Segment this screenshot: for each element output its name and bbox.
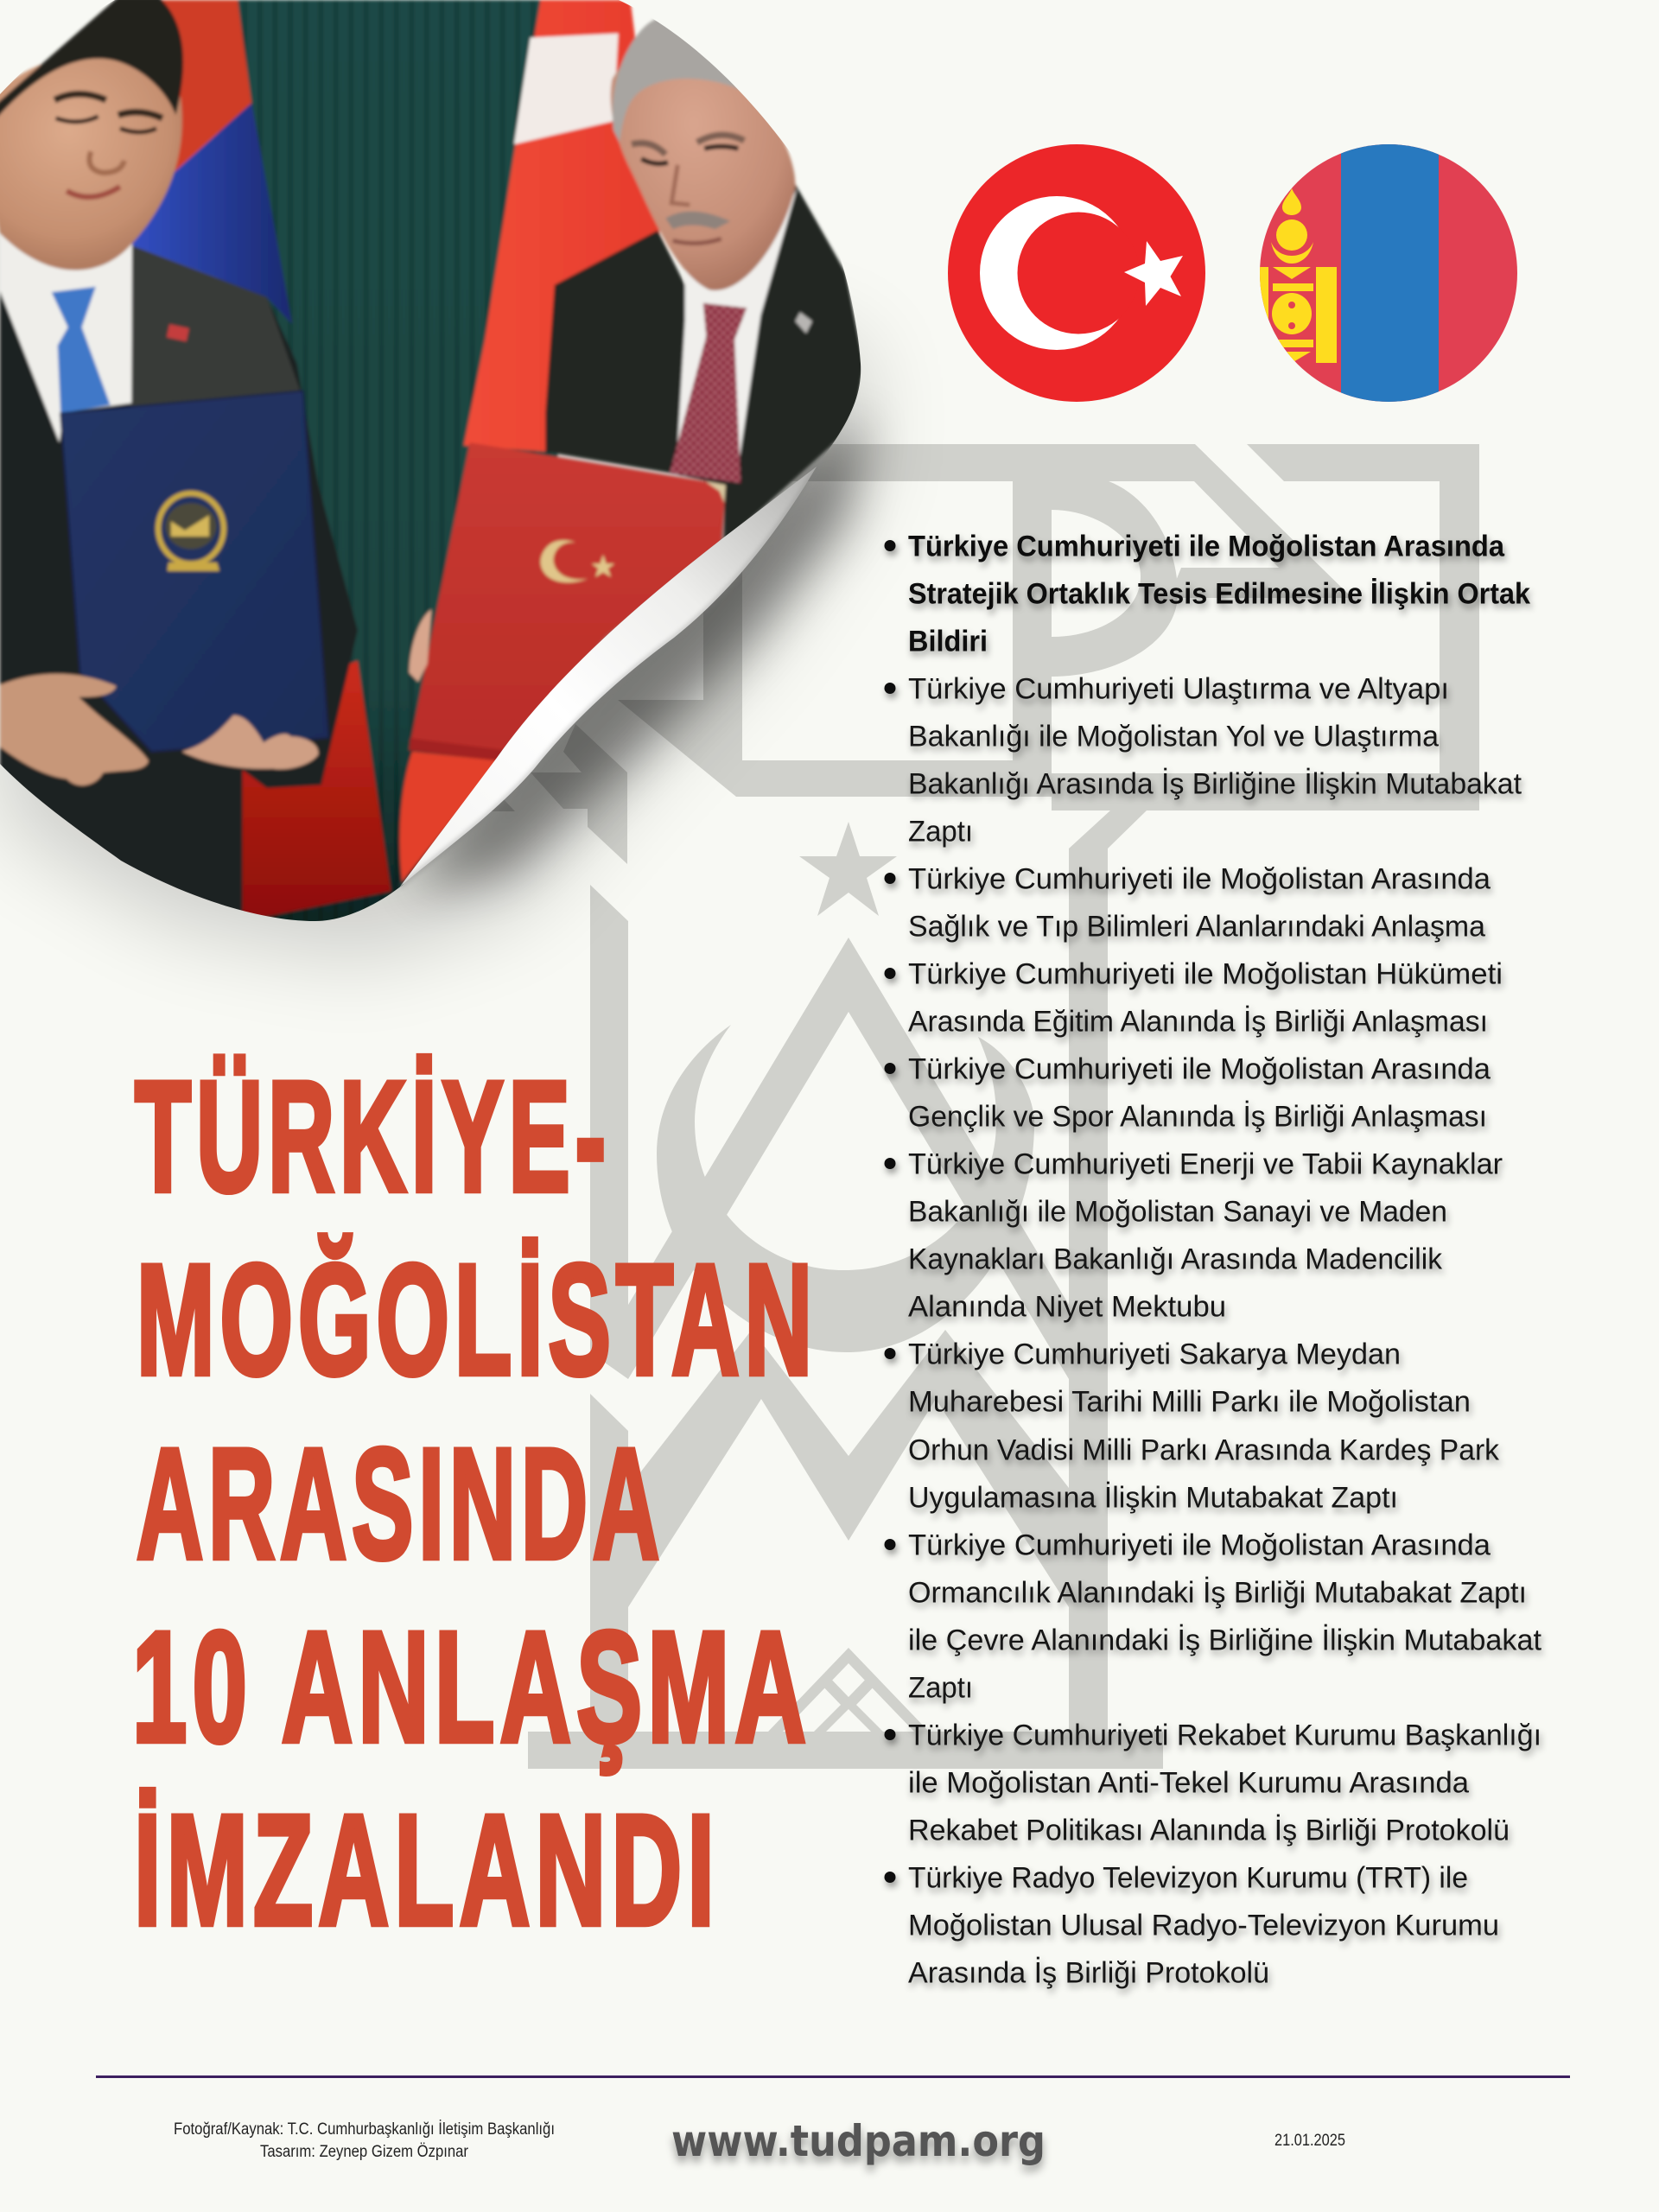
photo: leaders holding signed folders	[0, 0, 864, 951]
item 7: Türkiye Cumhuriyeti Sakarya Meydan	[908, 1338, 1401, 1370]
footer credits: Fotoğraf/Kaynak: T.C. Cumhurbaşkanlığı İletişim Başkanlığı	[174, 2120, 555, 2139]
item 6	[885, 1147, 1503, 1324]
hands on blue folder	[0, 674, 318, 785]
item 1: Bildiri	[908, 626, 988, 658]
watermark logo	[485, 444, 1479, 1769]
item 9: Rekabet Politikası Alanında İş Birliği Protokolü	[908, 1815, 1510, 1847]
item 6: Türkiye Cumhuriyeti Enerji ve Tabii Kaynaklar	[908, 1147, 1503, 1180]
item 8: Ormancılık Alanındaki İş Birliği Mutabakat Zaptı	[908, 1576, 1527, 1609]
red document folder	[410, 442, 726, 760]
title: MOĞOLİSTAN	[137, 1231, 817, 1408]
item 3	[885, 862, 1491, 944]
footer credits	[174, 2120, 555, 2161]
item 8: ile Çevre Alanındaki İş Birliğine İlişkin Mutabakat	[908, 1624, 1542, 1657]
item 3: Türkiye Cumhuriyeti ile Moğolistan Arasında	[908, 862, 1491, 895]
item 9	[885, 1719, 1541, 1847]
gold emblem	[158, 493, 224, 571]
footer rule	[96, 2075, 1570, 2078]
item 4	[885, 957, 1503, 1039]
soyombo symbol	[1258, 188, 1337, 363]
left leader	[0, 0, 358, 921]
item 9: Türkiye Cumhuriyeti Rekabet Kurumu Başkanlığı	[908, 1719, 1541, 1752]
Turkish flag behind right leader	[400, 0, 661, 882]
item 1	[885, 531, 1530, 658]
item 6: Bakanlığı ile Moğolistan Sanayi ve Maden	[908, 1196, 1447, 1229]
item 2: Bakanlığı ile Moğolistan Yol ve Ulaştırma	[908, 721, 1439, 753]
item 2	[885, 672, 1522, 849]
item 4: Arasında Eğitim Alanında İş Birliği Anlaşması	[908, 1006, 1488, 1039]
item 9: ile Moğolistan Anti-Tekel Kurumu Arasında	[908, 1766, 1469, 1799]
photo shadow	[0, 173, 864, 959]
flag: Turkey	[948, 144, 1206, 403]
item 8: Zaptı	[908, 1671, 973, 1704]
item 6: Alanında Niyet Mektubu	[908, 1291, 1226, 1324]
item 1: Stratejik Ortaklık Tesis Edilmesine İlişkin Ortak	[908, 577, 1530, 610]
item 4: Türkiye Cumhuriyeti ile Moğolistan Hükümeti	[908, 957, 1503, 990]
item 8	[885, 1529, 1542, 1704]
item 10: Moğolistan Ulusal Radyo-Televizyon Kurumu	[908, 1910, 1499, 1942]
item 1: Türkiye Cumhuriyeti ile Moğolistan Arasında	[908, 531, 1505, 563]
item 10	[885, 1861, 1499, 1989]
curtain backdrop	[219, 0, 557, 951]
item 7: Uygulamasına İlişkin Mutabakat Zaptı	[908, 1481, 1398, 1514]
item 2: Bakanlığı Arasında İş Birliğine İlişkin Mutabakat	[908, 767, 1522, 800]
item 5	[885, 1052, 1491, 1134]
item 10: Türkiye Radyo Televizyon Kurumu (TRT) ile	[908, 1861, 1468, 1894]
item 5: Türkiye Cumhuriyeti ile Moğolistan Arasında	[908, 1052, 1491, 1085]
blue document folder	[60, 391, 328, 752]
agreements list	[885, 531, 1542, 1989]
flag: Mongolia	[1258, 144, 1518, 403]
title: İMZALANDI	[134, 1782, 720, 1958]
footer credits: Tasarım: Zeynep Gizem Özpınar	[260, 2143, 469, 2161]
page curl	[400, 467, 817, 887]
right hand on red folder	[410, 609, 431, 682]
title: 10 ANLAŞMA	[132, 1599, 811, 1775]
item 7: Orhun Vadisi Milli Parkı Arasında Kardeş Park	[908, 1434, 1500, 1467]
Mongolian flag behind left leader	[124, 0, 391, 921]
item 7: Muharebesi Tarihi Milli Parkı ile Moğolistan	[908, 1386, 1471, 1419]
item 7	[885, 1338, 1500, 1514]
item 6: Kaynakları Bakanlığı Arasında Madencilik	[908, 1243, 1443, 1275]
website address: www.tudpam.org	[671, 2116, 1046, 2166]
item 10: Arasında İş Birliği Protokolü	[908, 1956, 1269, 1989]
title: TÜRKİYE-	[135, 1048, 611, 1224]
item 2: Zaptı	[908, 816, 973, 849]
item 2: Türkiye Cumhuriyeti Ulaştırma ve Altyapı	[908, 672, 1449, 705]
item 8: Türkiye Cumhuriyeti ile Moğolistan Arasında	[908, 1529, 1491, 1562]
title: ARASINDA	[137, 1415, 664, 1592]
right leader	[545, 18, 864, 543]
item 3: Sağlık ve Tıp Bilimleri Alanlarındaki Anlaşma	[908, 911, 1485, 944]
title	[132, 1048, 817, 1958]
item 5: Gençlik ve Spor Alanında İş Birliği Anlaşması	[908, 1101, 1487, 1134]
date: 21.01.2025	[1274, 2132, 1345, 2150]
gold crescent and star	[541, 540, 614, 582]
